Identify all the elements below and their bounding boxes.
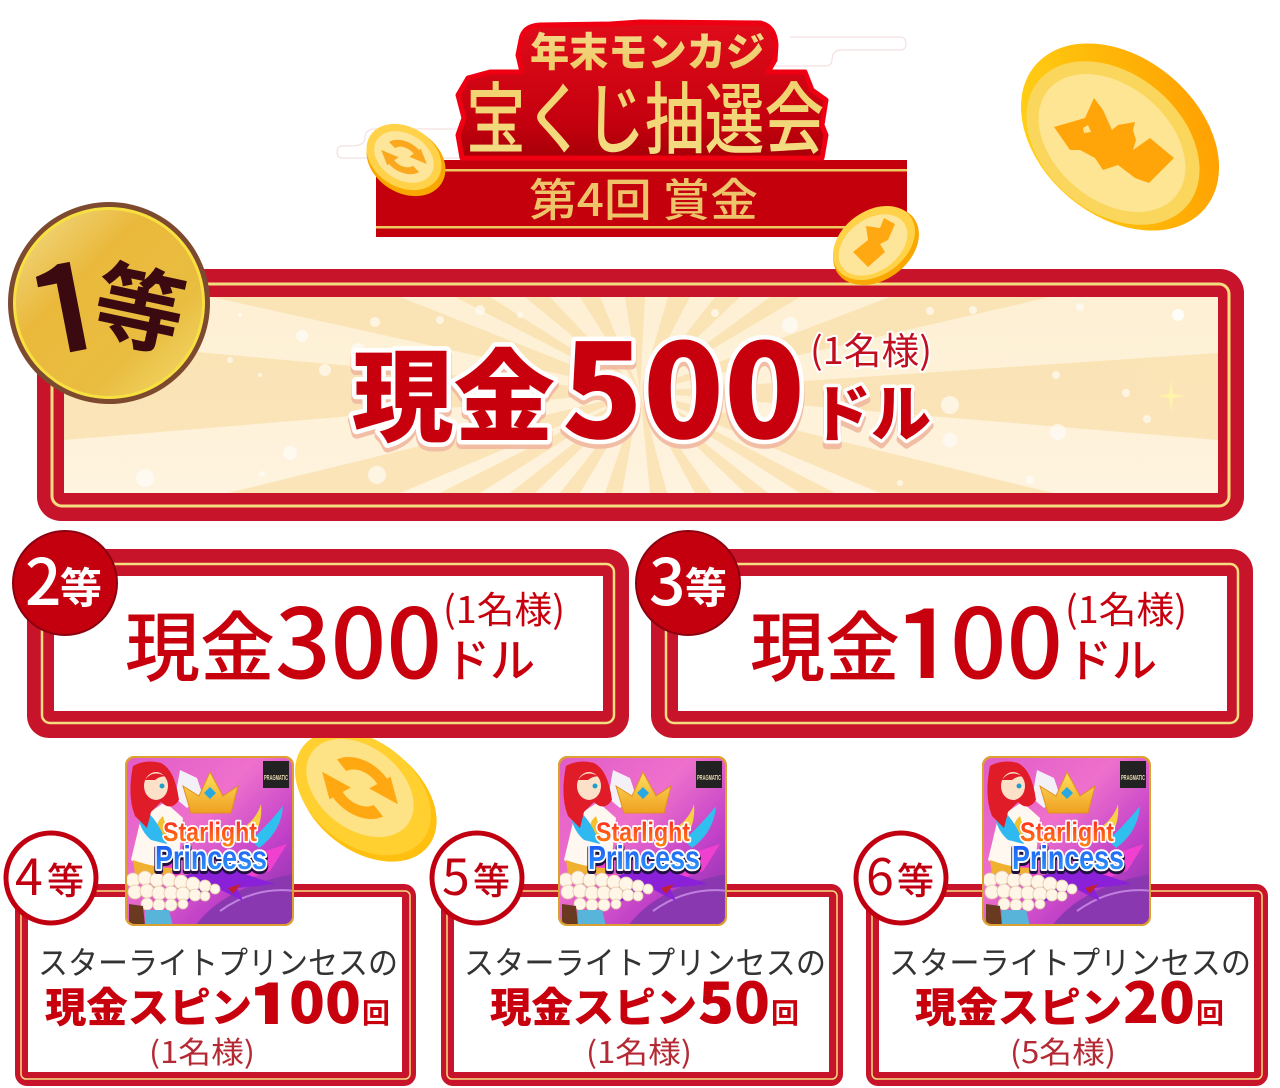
game logo: Princess [155,839,267,876]
winners count: (1名様) [586,1028,692,1072]
badge: fifth prize: 等 [473,851,510,905]
banner text: 第4回 賞金 [529,164,758,229]
badge: third prize [636,531,740,635]
free spins: 50 [698,959,770,1040]
winners count: (1名様) [149,1028,255,1072]
banner: round prize [376,160,907,237]
prize text: (1名様) [1065,580,1187,634]
free spins [915,959,1224,1040]
free spins: 現金スピン [490,974,697,1034]
title line 1: 年末モンカジ [530,20,765,78]
game logo: Starlight [1020,817,1114,847]
game art: Starlight Princess (4th) [125,756,295,926]
prize amount shadow [352,292,931,480]
free spins: 現金スピン [915,974,1122,1034]
badge: first prize medal [6,196,210,418]
game logo: Princess [1012,839,1124,876]
badge: fifth prize [432,833,522,923]
game logo [1012,817,1124,878]
cloud decoration left [337,129,470,158]
game logo: Starlight [596,817,690,847]
icon: coin behind game art [295,738,437,862]
game logo: Princess [588,839,700,876]
free spins [45,980,388,1026]
game name: スターライトプリンセスの [464,938,826,984]
game art: Starlight Princess (5th) [558,756,728,926]
prize text: 1 [893,562,957,724]
badge: third prize: 3 [649,532,685,624]
badge: sixth prize [856,833,946,923]
winners count: (5名様) [1010,1028,1116,1072]
game logo: Princess [588,841,700,878]
game name: スターライトプリンセスの [889,938,1251,984]
prize text: ドル [445,625,535,691]
prize text: 00 [950,567,1063,706]
panel: third prize [651,549,1253,738]
free spins: 回 [771,992,799,1032]
free spins: 1 [248,952,292,1057]
badge kanji: 等 [83,230,198,376]
prize amount shadow: 500 [562,292,805,480]
game logo: Princess [155,841,267,878]
free spins: 回 [1196,992,1224,1032]
panel: fourth prize [15,884,416,1086]
badge: fourth prize [6,833,96,923]
badge: sixth prize: 等 [897,851,934,905]
badge: fifth prize: 5 [442,838,470,910]
panel: fifth prize [441,884,843,1086]
panel: sixth prize [866,884,1268,1086]
badge: third prize: 等 [685,555,727,616]
prize text: (1名様) [443,580,565,634]
prize text: 現金 [125,587,275,697]
badge: second prize: 2 [25,532,61,624]
prize amount: ドル [811,364,931,454]
icon: small coin left [353,110,459,210]
free spins: 20 [1123,959,1195,1040]
game art: Starlight Princess (6th): PRAGMATIC [1121,775,1145,782]
game logo [588,817,700,878]
badge: sixth prize: 6 [866,838,894,910]
title: lottery event [458,20,826,170]
icon: small coin right [818,191,934,301]
title line 2: 宝くじ抽選会 [466,58,824,170]
cloud decoration upper right [775,37,906,66]
game logo: Princess [1012,841,1124,878]
prize text [752,592,1184,682]
game name: スターライトプリンセスの [38,938,398,984]
sparkle top right [1172,309,1184,321]
free spins: 現金スピン [45,974,252,1034]
free spins: 回 [362,992,390,1032]
game logo: Starlight [163,817,257,847]
game logo [155,817,267,878]
badge number: 1 [6,196,128,418]
prize amount shadow: 現金 [352,321,555,466]
badge: fourth prize: 等 [47,851,84,905]
game art: Starlight Princess (5th): PRAGMATIC [697,775,721,782]
panel: first prize [37,269,1244,521]
prize amount [352,288,931,476]
prize text: 300 [275,567,442,706]
icon: big gold coin [984,5,1256,269]
free spins [490,959,799,1040]
badge: second prize: 等 [60,555,102,616]
badge: second prize [13,531,117,635]
prize amount: 500 [562,288,805,476]
prize text [125,567,565,706]
game art: Starlight Princess (6th) [982,756,1152,926]
prize text: 現金 [750,587,900,697]
free spins: 00 [289,959,361,1040]
panel: second prize [27,549,629,738]
badge: fourth prize: 4 [15,838,43,910]
game art: Starlight Princess (4th): PRAGMATIC [264,775,288,782]
prize amount: 現金 [352,317,555,462]
winners count: (1名様) [810,321,932,375]
prize text: ドル [1067,625,1157,691]
prize amount shadow: ドル [811,369,931,459]
sparkle [1157,380,1185,412]
